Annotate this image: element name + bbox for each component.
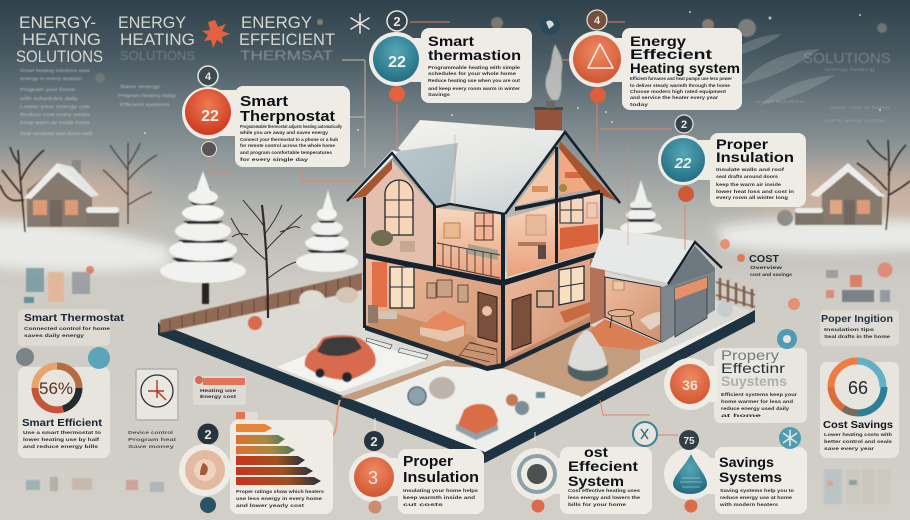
body text [568, 488, 641, 507]
body text: for every single day [240, 157, 309, 162]
yard items [248, 316, 545, 440]
orange marker lower [788, 298, 800, 310]
title: Suystems [721, 373, 787, 389]
body text: Cost effective heating uses [568, 488, 641, 493]
title: Therpnostat [240, 108, 335, 125]
value: 56% [39, 379, 73, 398]
dial: 22 teal [369, 32, 432, 86]
left gable edge [347, 153, 436, 207]
body text: Saving systems help you to [720, 488, 794, 493]
body text: cut costs [403, 502, 444, 507]
main house [346, 44, 620, 371]
body text: schedules for your whole home [428, 71, 517, 76]
title: Smart [240, 93, 288, 110]
title: Smart Efficient [22, 418, 103, 429]
heading: energy heating solutions: SOLUTIONS [16, 47, 103, 66]
left faded paragraph: Reduce cost every winter [20, 112, 91, 117]
title: thermastion [428, 47, 521, 63]
badge [16, 348, 34, 366]
orange legend: Heating use [200, 388, 237, 393]
snow ground right [715, 218, 910, 252]
cost label: Overview [750, 265, 783, 270]
left faded paragraph: Smart heating solutions save [20, 68, 91, 73]
body text [824, 432, 893, 451]
device caption: Device control [128, 430, 173, 435]
sofa [420, 311, 467, 342]
bare tree front [231, 200, 302, 318]
driveway [277, 337, 427, 392]
badge: number 4 [198, 66, 218, 86]
callout: energy efficient heating system [569, 10, 742, 110]
top right faded title: smart solutions [755, 99, 806, 104]
body text: and program comfortable temperatures [240, 150, 332, 155]
pine tree middle [296, 190, 358, 272]
dial: 36 [682, 377, 698, 393]
peach dial [179, 444, 231, 496]
badge: number 2 [675, 115, 693, 133]
heading: energy efficient thermostat: ENERGY [241, 13, 312, 32]
upper right lower rooms [507, 204, 555, 277]
body text: Connected control for home [24, 326, 111, 331]
title: Savings [719, 454, 774, 470]
right door [512, 294, 531, 350]
body text: Lower heating costs with [824, 432, 892, 437]
body text: and service the heater every year [630, 95, 718, 100]
title: Insulation [716, 149, 794, 165]
garage gable [665, 246, 715, 288]
panel: smart efficient donut [16, 347, 110, 458]
house right [777, 163, 886, 226]
icon: snowflake [351, 14, 369, 33]
bars [236, 412, 321, 485]
lower right window [559, 266, 584, 305]
left faded paragraph: Seal windows and doors well [20, 131, 92, 136]
garage [590, 223, 722, 350]
left faded paragraph: Keep warm air inside home [20, 120, 91, 125]
attic details [532, 172, 583, 192]
body text [428, 65, 521, 97]
garage side [662, 268, 715, 343]
title: System [568, 473, 624, 489]
title: Poper Ingition [821, 314, 893, 325]
house left [24, 160, 119, 227]
callout: proper insulation bottom [349, 431, 484, 514]
bench [560, 302, 590, 323]
title: Proper [403, 453, 453, 470]
garage roof snow [590, 228, 695, 283]
snow surface [158, 270, 753, 452]
garage picture [613, 281, 624, 290]
body text [716, 167, 794, 200]
body text: Connect your thermostat to a phone or a hub [240, 137, 338, 142]
body text: with modern heaters [719, 502, 779, 507]
heading: energy heating: ENERGY [118, 13, 186, 32]
title: Energy [630, 33, 686, 49]
badge: number 2 [387, 11, 407, 31]
car [305, 335, 376, 382]
body text: reduce energy used daily [721, 406, 790, 411]
ground floor left wall [365, 255, 503, 368]
heading: energy efficient thermostat: THERMSAT [240, 47, 334, 63]
body text: home warmer for less and [721, 399, 793, 404]
wood eave right [559, 141, 617, 201]
donut chart [831, 361, 884, 413]
ridge line [436, 204, 505, 214]
donut chart [35, 366, 79, 410]
body text: every room all winter long [716, 195, 788, 200]
badge: brown: 4 [594, 15, 601, 27]
wooden path [340, 325, 640, 400]
body text: Seal drafts in the home [824, 334, 891, 339]
heading: energy heating: HEATING [120, 30, 195, 49]
middle room sofa [468, 244, 498, 260]
small marker [202, 142, 216, 156]
top right faded title: warm winter rooms [825, 118, 886, 123]
fence right [716, 278, 755, 308]
title: ost [584, 444, 608, 460]
heading: energy heating solutions: ENERGY- [19, 13, 96, 32]
body text [23, 430, 101, 449]
ground floor right floor [507, 316, 590, 363]
body text: Efficient systems keep your [721, 392, 797, 397]
body text: lower heating use by half [23, 437, 100, 442]
title: Cost Savings [823, 419, 893, 431]
body text: Proper ratings show which heaters [236, 489, 325, 494]
arched window [385, 180, 413, 235]
panel: smart thermostat left [18, 309, 125, 346]
small marker [684, 500, 698, 512]
body text: save every year [824, 446, 874, 451]
small marker [200, 497, 216, 513]
dial: 22 teal [658, 135, 716, 185]
small marker [389, 86, 405, 102]
callout: property effecting [664, 329, 807, 423]
callout: cost efficient system [511, 444, 652, 514]
dial: 22 teal: 22 [388, 54, 406, 71]
badge: 2: 2 [370, 434, 378, 449]
body text: keep warmth inside and [403, 495, 475, 500]
badge: brown [587, 10, 607, 30]
callout: proper insulation [658, 115, 806, 207]
roof snow cap [620, 223, 662, 233]
orange marker [720, 239, 730, 249]
left room details [518, 215, 546, 259]
faded data table [824, 469, 890, 504]
blue icon [777, 329, 797, 349]
pine tree large [160, 171, 246, 304]
left faded paragraph: Lower your energy use [20, 104, 91, 109]
body text: bills for your home [568, 502, 627, 507]
orange legend: Energy cost [200, 394, 237, 399]
platform edge [158, 310, 755, 463]
panel: poper ingition [820, 310, 899, 346]
curtain [372, 262, 387, 307]
device caption: Program heat [128, 437, 177, 442]
device caption: Save money [128, 444, 175, 449]
badge: number 2: 2 [681, 119, 687, 131]
title: Effecient [630, 46, 712, 62]
badge: 75: 75 [683, 436, 695, 447]
icon: star burst [202, 20, 230, 48]
small marker [678, 186, 694, 202]
bare tree left [0, 147, 44, 232]
title: Propery [721, 347, 779, 363]
body text: Programmable thermostat adjusts heating automatically [240, 124, 342, 129]
body text: and keep every room warm in winter [428, 86, 520, 91]
lower left window [390, 267, 414, 308]
right gable edge [505, 132, 620, 214]
connector lines [210, 22, 685, 441]
left gable snow lip [346, 150, 398, 200]
left faded paragraph [20, 68, 177, 136]
chimney smoke [546, 44, 562, 100]
body text: less energy and lowers the [568, 495, 641, 500]
title: Effectinr [721, 360, 785, 376]
body text: use less energy in every home [236, 496, 323, 501]
dial: triangle [569, 31, 633, 87]
main roof snow [398, 120, 565, 213]
blue icon [88, 347, 110, 369]
body text: Programmable heating with simple [428, 65, 521, 70]
heading: energy heating [118, 13, 195, 63]
body text: today [630, 102, 649, 107]
panel: cost savings donut [820, 361, 899, 458]
middle room window [475, 213, 493, 240]
body text: at home [721, 413, 762, 418]
heading: energy heating: SOLUTIONS [120, 48, 195, 63]
icon: teal marker left [633, 422, 657, 446]
body text: Reduce heating use when you are out [428, 78, 521, 83]
body text: while you are away and saves energy [239, 130, 328, 135]
shrubs [299, 287, 733, 381]
body text [403, 488, 479, 507]
right picture [537, 291, 553, 307]
body text: Efficient furnaces and heat pumps use less power [630, 76, 732, 81]
bare tree middle [103, 143, 157, 224]
left icon cluster [24, 266, 94, 303]
left heading group [16, 13, 335, 66]
body text: Insulate walls and roof [716, 167, 785, 172]
floor band [365, 250, 602, 286]
background scene [0, 140, 910, 272]
isometric platform [158, 270, 755, 463]
callout: smart thermostat [182, 66, 350, 167]
snow front plate [355, 311, 753, 452]
title: Smart Thermostat [24, 313, 125, 324]
bedroom details [560, 198, 598, 250]
balcony railing [437, 243, 500, 278]
top right faded title: energy heating [825, 67, 876, 72]
body text: Use a smart thermostat to [23, 430, 101, 435]
chimney [534, 101, 563, 130]
decorative ornaments [95, 17, 887, 83]
body text: for remote control across the whole home [240, 143, 335, 148]
house base [365, 322, 590, 371]
right icon cluster [826, 262, 892, 302]
badge: 75 [679, 430, 699, 450]
dial: gauge [511, 448, 565, 500]
middle room [436, 208, 503, 282]
middle room picture [444, 223, 460, 238]
dial: 22 red [182, 87, 245, 139]
body text [24, 326, 111, 338]
body text [721, 392, 797, 418]
body text: and lower yearly cost [236, 503, 305, 508]
body text: saves daily energy [24, 333, 85, 338]
garage floor [590, 319, 660, 350]
body text: Savings [428, 92, 451, 97]
wood eave left [351, 160, 392, 199]
ground floor left floor [367, 312, 487, 367]
orange legend [193, 376, 246, 405]
body text: Insulating your home helps [403, 488, 479, 493]
title: Heating system [630, 60, 740, 76]
pine tree right [621, 180, 661, 233]
cost label: cost and savings [750, 272, 792, 277]
body text: to deliver steady warmth through the home [630, 83, 730, 88]
garage door [675, 277, 707, 337]
left faded paragraph: Program heating today [118, 93, 177, 98]
small marker [532, 500, 544, 512]
plant and chairs [371, 230, 415, 252]
body text: Insulation tips [824, 327, 875, 332]
icon: teal badge near chimney [540, 15, 560, 35]
icon: teal fan [779, 427, 801, 449]
vertical frames [363, 147, 603, 366]
body text [630, 76, 732, 107]
device caption [128, 430, 177, 449]
heading: energy heating solutions [16, 13, 103, 66]
body text: lower heat loss and cost in [716, 189, 794, 194]
dormer roof [392, 143, 458, 206]
badge: 2 [198, 424, 218, 444]
body text: better control and seals [824, 439, 893, 444]
top right faded title: lower cost at home [830, 105, 891, 110]
top right faded title: SOLUTIONS [803, 50, 891, 67]
bare tree right [857, 140, 910, 230]
garage roof edge [668, 242, 722, 284]
garage table [608, 310, 634, 328]
value: 66 [848, 378, 868, 398]
dial: 3: 3 [368, 468, 378, 488]
garage door window [675, 277, 707, 300]
badge: number 2: 2 [393, 14, 401, 29]
garage chairs [640, 312, 660, 330]
fence left [160, 273, 362, 333]
body text: seal drafts around doors [716, 174, 778, 179]
body text [239, 124, 342, 162]
faded bottom icons [26, 477, 164, 492]
dial: 22 red: 22 [201, 108, 219, 125]
attic rooms [515, 152, 555, 206]
title: Smart [428, 33, 474, 49]
body text [719, 488, 794, 507]
body text: Choose modern high rated equipment [630, 89, 727, 94]
small marker [368, 500, 382, 514]
dial [664, 358, 718, 410]
left door [478, 292, 497, 342]
left faded paragraph: with schedules daily [20, 96, 79, 101]
attic divider [515, 190, 600, 211]
stairs [455, 342, 497, 369]
body text: reduce energy use at home [720, 495, 793, 500]
body text [824, 327, 891, 339]
heading: energy efficient thermostat [239, 13, 335, 63]
dial: 22 teal: 22 [674, 155, 692, 172]
attic room right [559, 146, 592, 195]
body text [236, 489, 325, 508]
panel: energy rating chart [179, 412, 333, 514]
left faded paragraph: Program your home [20, 87, 76, 92]
snow ground left [0, 221, 170, 272]
wall pictures [427, 280, 468, 302]
body text: keep the warm air inside [716, 182, 782, 187]
badge: number 4: 4 [205, 71, 212, 83]
garage opening [605, 277, 661, 342]
dial: drop [664, 448, 718, 500]
small furniture [368, 305, 397, 323]
cost label [737, 253, 792, 277]
left faded paragraph: Save energy [120, 84, 161, 89]
small marker [590, 87, 606, 103]
thermostat device [136, 369, 178, 420]
top right faded title [720, 34, 891, 123]
brick strip [590, 258, 605, 325]
title: Insulation [403, 469, 479, 486]
left faded paragraph: Efficient systems [120, 102, 171, 107]
badge: 2: 2 [204, 427, 212, 442]
ground floor right wall [503, 255, 590, 365]
left faded paragraph: energy in every season [20, 76, 83, 81]
callout: smart thermostat 2 [369, 11, 532, 103]
upper right second room [558, 192, 600, 262]
heading: energy heating solutions: HEATING [22, 30, 101, 49]
title: Effecient [568, 458, 638, 474]
callout: savings systems [664, 430, 807, 514]
title: Proper [716, 136, 769, 152]
title: Systems [719, 469, 782, 485]
upper left wall [365, 160, 433, 268]
cost label: COST [749, 253, 780, 265]
snow steps [366, 338, 428, 359]
heading: energy efficient thermostat: EFFEICIENT [239, 30, 335, 49]
body text: and reduce energy bills [23, 444, 99, 449]
